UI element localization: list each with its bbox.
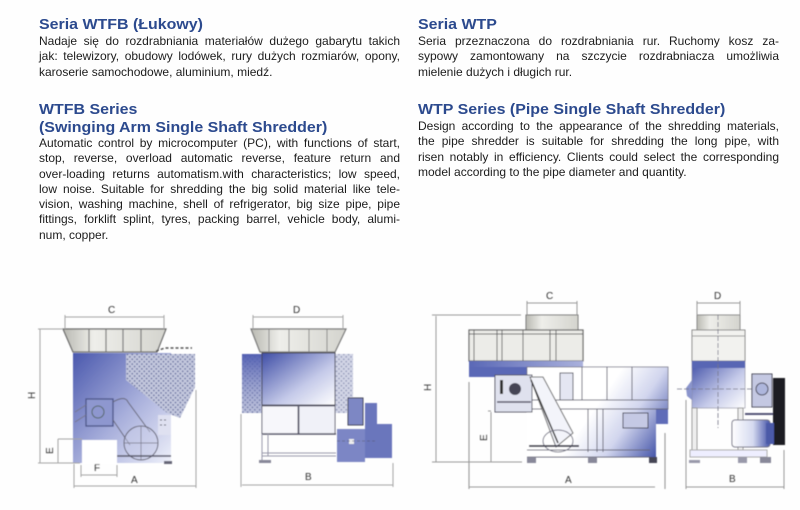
motor and drive	[337, 398, 392, 462]
hopper	[251, 329, 346, 352]
dimension labels: C	[546, 291, 553, 302]
dimension labels: C	[108, 305, 115, 316]
diagram: WTFB front view	[241, 305, 393, 487]
text block: Seria WTP description: Seria przeznaczona do rozdrabniania rur. Ruchomy kosz za-	[418, 34, 779, 48]
dimension labels: E	[479, 434, 490, 441]
heading: Seria WTP: Seria WTP	[418, 17, 497, 33]
gearbox	[745, 374, 782, 414]
hopper	[692, 315, 745, 361]
dimension labels: H	[27, 392, 38, 399]
motor	[732, 420, 774, 447]
text block: Seria WTP description	[418, 34, 780, 78]
machine body	[677, 315, 771, 463]
dimension labels: F	[94, 463, 100, 474]
dimension labels: H	[423, 384, 434, 391]
text block: WTP Series description: Design according to the appearance of the shredding materials,	[418, 119, 779, 133]
heading: WTP Series: WTP Series (Pipe Single Shaft Shredder)	[418, 102, 725, 118]
dimension lines	[241, 315, 393, 487]
text block: WTFB Series description: fittings, forklift splint, tyres, packing barrel, vehicle body, alumi-	[39, 212, 400, 226]
main body	[259, 353, 336, 463]
gearbox	[495, 375, 532, 412]
dimension labels	[27, 305, 138, 486]
text block: WTFB Series description: vision, washing machine, shell of refrigerator, big size pipe, pipe	[39, 197, 400, 211]
dimension labels: D	[714, 291, 721, 302]
text block: WTP Series description: the pipe shredder is suitable for shredding the long pipe, with	[418, 134, 779, 148]
text block: Seria WTFB description: jak: telewizory, obudowy lodówek, rury dużych rozmiarów, opony,	[39, 49, 400, 63]
text block: WTP Series description: model according to the pipe diameter and quantity.	[418, 165, 687, 179]
text block: WTFB Series description: Automatic control by microcomputer (PC), with functions of start,	[39, 136, 400, 150]
diagram: WTP front view	[677, 291, 785, 489]
text block: WTFB Series description: stop, reverse, overload automatic reverse, feature return and	[39, 151, 400, 165]
text block: WTFB Series description: num, copper.	[39, 228, 108, 242]
heading: WTFB Series	[39, 102, 327, 136]
heading: WTFB Series: (Swinging Arm Single Shaft Shredder)	[39, 120, 327, 136]
conveyor	[529, 373, 579, 452]
dimension labels: E	[45, 447, 56, 454]
dimension labels	[714, 291, 736, 485]
dimension lines	[686, 301, 784, 489]
side hatch panels	[242, 354, 353, 413]
text block: Seria WTP description: sypowy zamontowany na szczycie rozdrabniacza umożliwia	[418, 49, 779, 63]
text block: WTFB Series description	[39, 136, 400, 242]
machine body	[73, 348, 195, 464]
text block: WTP Series description: risen notably in efficiency. Clients could select the corresponding	[418, 150, 779, 164]
text block: WTFB Series description: over-loading returns automatism.with characteristics; low speed,	[39, 166, 400, 180]
hopper	[469, 315, 583, 361]
dimension labels: B	[305, 472, 312, 483]
dimension lines	[38, 315, 196, 488]
text block: Seria WTP description: mielenie dużych i długich rur.	[418, 64, 572, 78]
dimension labels: A	[565, 475, 572, 486]
text block: Seria WTFB description: Nadaje się do rozdrabniania materiałów dużego gabarytu takich	[39, 34, 400, 48]
dimension labels: A	[131, 475, 138, 486]
text block: WTP Series description	[418, 119, 779, 179]
machine body	[469, 361, 668, 463]
diagram: WTP side view	[423, 291, 668, 489]
dimension labels: B	[729, 474, 736, 485]
text block: Seria WTFB description: karoserie samochodowe, aluminium, miedź.	[39, 64, 272, 78]
hopper	[63, 329, 166, 352]
dimension labels	[423, 291, 572, 486]
dimension lines	[432, 301, 665, 489]
text block: WTFB Series description: low noise. Suitable for shredding the big solid material like tele-	[39, 182, 400, 196]
cutout box	[82, 440, 117, 464]
diagram: WTFB side view	[27, 305, 196, 488]
text block: Seria WTFB description	[38, 34, 400, 78]
heading: WTFB Series: WTFB Series	[39, 102, 137, 118]
dimension labels	[293, 305, 312, 483]
flywheel	[773, 378, 785, 445]
heading: Seria WTFB: Seria WTFB (Łukowy)	[39, 17, 203, 33]
dimension labels: D	[293, 305, 300, 316]
